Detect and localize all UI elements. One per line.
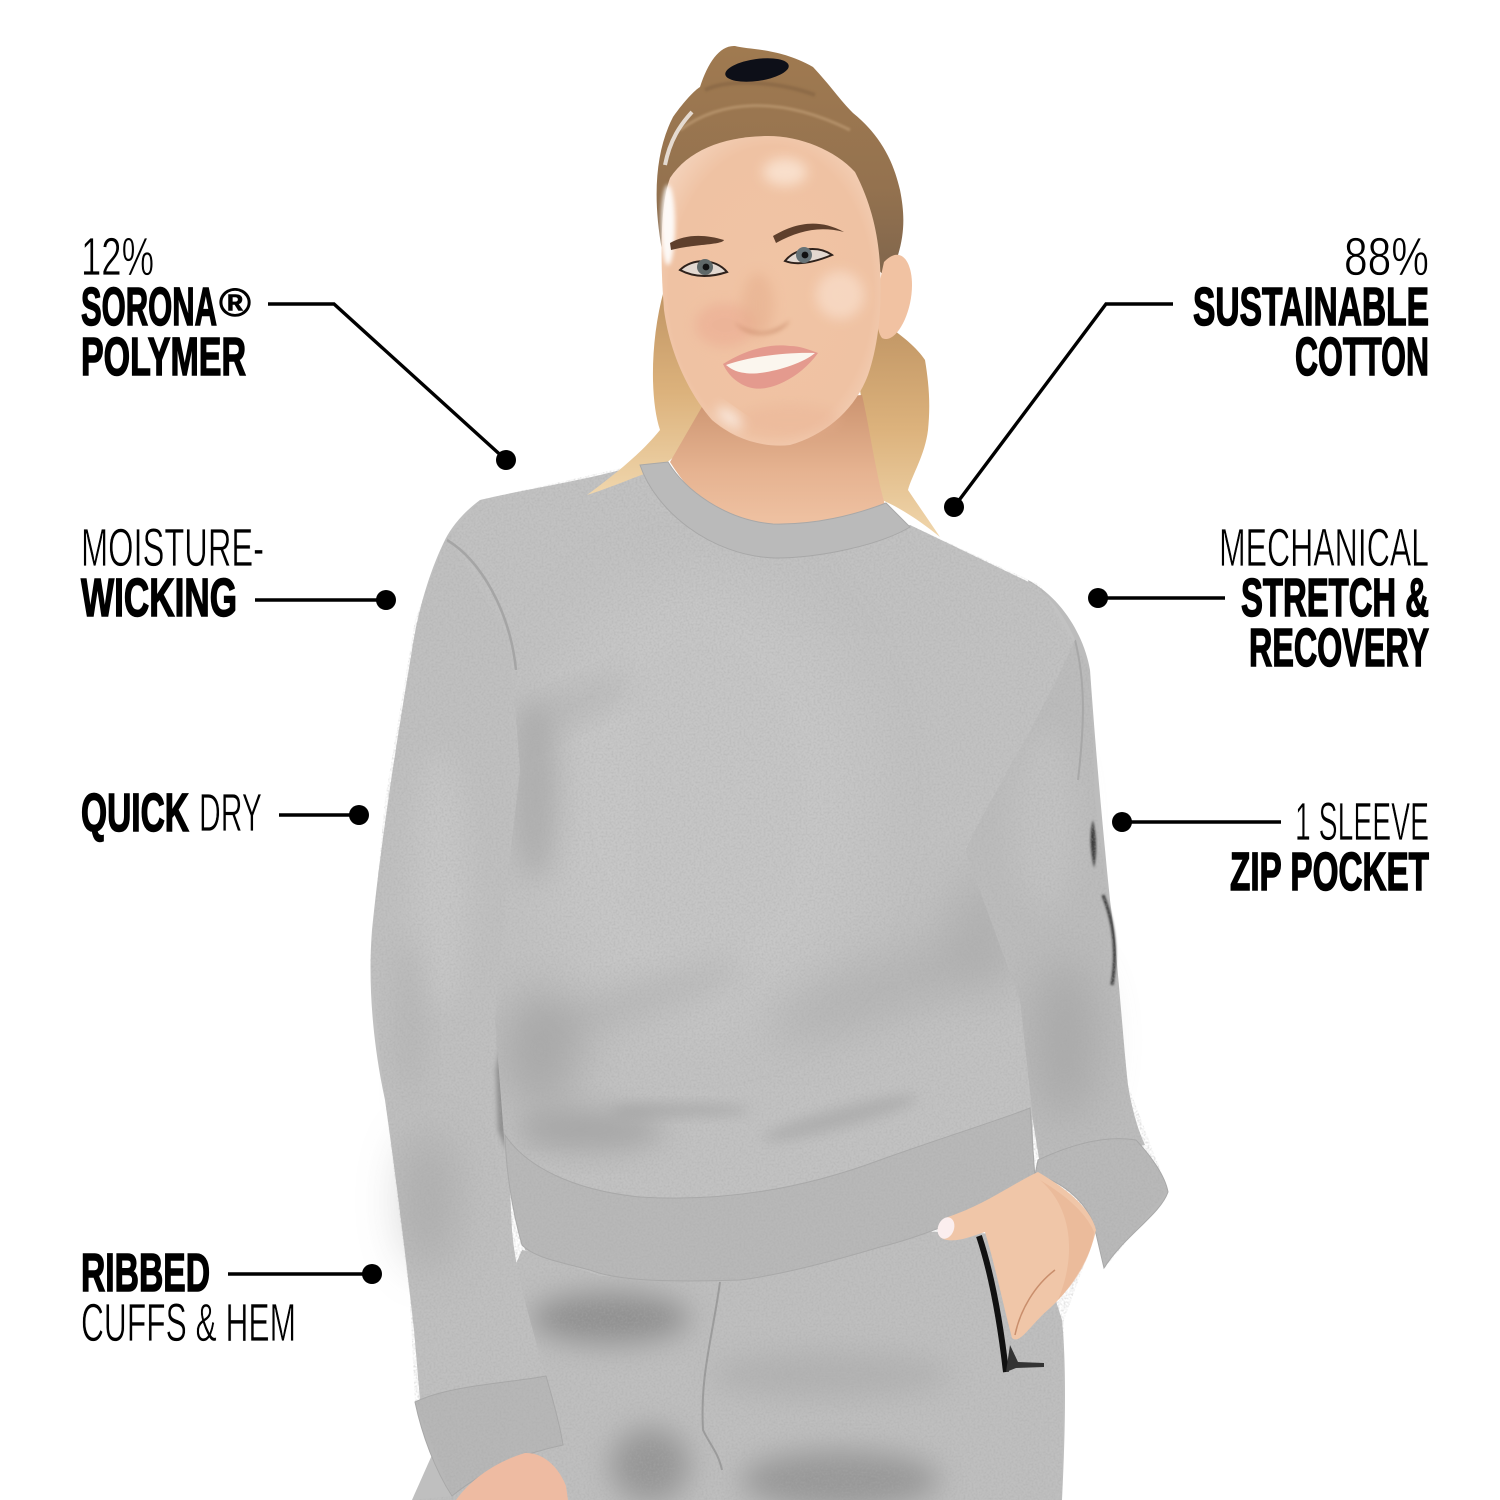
dark gap between arm and torso bbox=[496, 1040, 510, 1150]
armhole seam bbox=[447, 540, 516, 670]
callout: quick dry bbox=[81, 783, 369, 843]
ponytail hair lower right bbox=[860, 320, 940, 537]
callout: moisture-wicking bbox=[81, 518, 396, 628]
left eye bbox=[680, 259, 727, 276]
leader line bbox=[954, 304, 1173, 507]
label: polymer: POLYMER bbox=[81, 327, 246, 387]
fabric heather texture bbox=[360, 460, 1180, 1500]
sleeve zip pocket bbox=[1090, 820, 1115, 985]
leader dot bbox=[376, 590, 396, 610]
hair tie scrunchie bbox=[724, 55, 790, 85]
label: Sorona: SORONA bbox=[81, 277, 217, 337]
label: quick: QUICK bbox=[81, 783, 189, 843]
leader line bbox=[268, 304, 506, 460]
hair strands bbox=[665, 83, 850, 165]
leader line bbox=[255, 598, 386, 602]
ribbed hem bbox=[505, 1108, 1036, 1281]
label: registered mark: ® bbox=[219, 281, 251, 325]
left eyebrow bbox=[670, 236, 724, 250]
sweatpants bbox=[412, 1230, 1065, 1500]
label: 12%: 12% bbox=[81, 227, 154, 287]
hair top of head bbox=[657, 46, 903, 280]
callout: ribbed cuffs and hem bbox=[81, 1243, 382, 1353]
leader line bbox=[279, 813, 359, 817]
label: cuffs and hem: CUFFS & HEM bbox=[81, 1293, 296, 1353]
face bbox=[662, 136, 881, 446]
callout: 12% Sorona polymer bbox=[81, 227, 516, 470]
ribbed collar bbox=[640, 462, 910, 558]
right eyebrow bbox=[773, 224, 844, 243]
leader dot bbox=[1088, 588, 1108, 608]
nose bbox=[735, 320, 790, 335]
label: 88%: 88% bbox=[1344, 227, 1429, 287]
label: dry: DRY bbox=[199, 783, 262, 843]
right hand in pocket bbox=[935, 1172, 1096, 1339]
label: ribbed: RIBBED bbox=[81, 1243, 210, 1303]
leader dot bbox=[1112, 812, 1132, 832]
callout: mechanical stretch and recovery bbox=[1088, 518, 1429, 678]
leader dot bbox=[349, 805, 369, 825]
leader line bbox=[1122, 820, 1281, 824]
face shading and features bbox=[661, 158, 864, 436]
leader dot bbox=[944, 497, 964, 517]
ponytail hair lower left bbox=[587, 290, 712, 495]
leader line bbox=[228, 1272, 372, 1276]
left ribbed cuff bbox=[415, 1376, 563, 1496]
right ribbed cuff bbox=[1035, 1139, 1168, 1268]
right sleeve bbox=[965, 580, 1145, 1165]
leader dot bbox=[362, 1264, 382, 1284]
left hand bbox=[456, 1453, 568, 1500]
label: moisture: MOISTURE- bbox=[81, 518, 264, 578]
pants zipper bbox=[979, 1236, 1044, 1372]
mouth bbox=[723, 345, 818, 389]
ear bbox=[877, 255, 912, 339]
sweatshirt torso bbox=[447, 464, 1075, 1280]
neck bbox=[670, 395, 885, 536]
label: wicking: WICKING bbox=[81, 568, 237, 628]
callout: 88% sustainable cotton bbox=[944, 227, 1429, 517]
callout: 1 sleeve zip pocket bbox=[1112, 792, 1429, 902]
leader dot bbox=[496, 450, 516, 470]
leader line bbox=[1098, 596, 1225, 600]
pants centre seam bbox=[703, 1282, 722, 1470]
model photo illustration bbox=[360, 46, 1180, 1500]
right eye bbox=[785, 247, 832, 263]
left sleeve bbox=[371, 500, 560, 1400]
